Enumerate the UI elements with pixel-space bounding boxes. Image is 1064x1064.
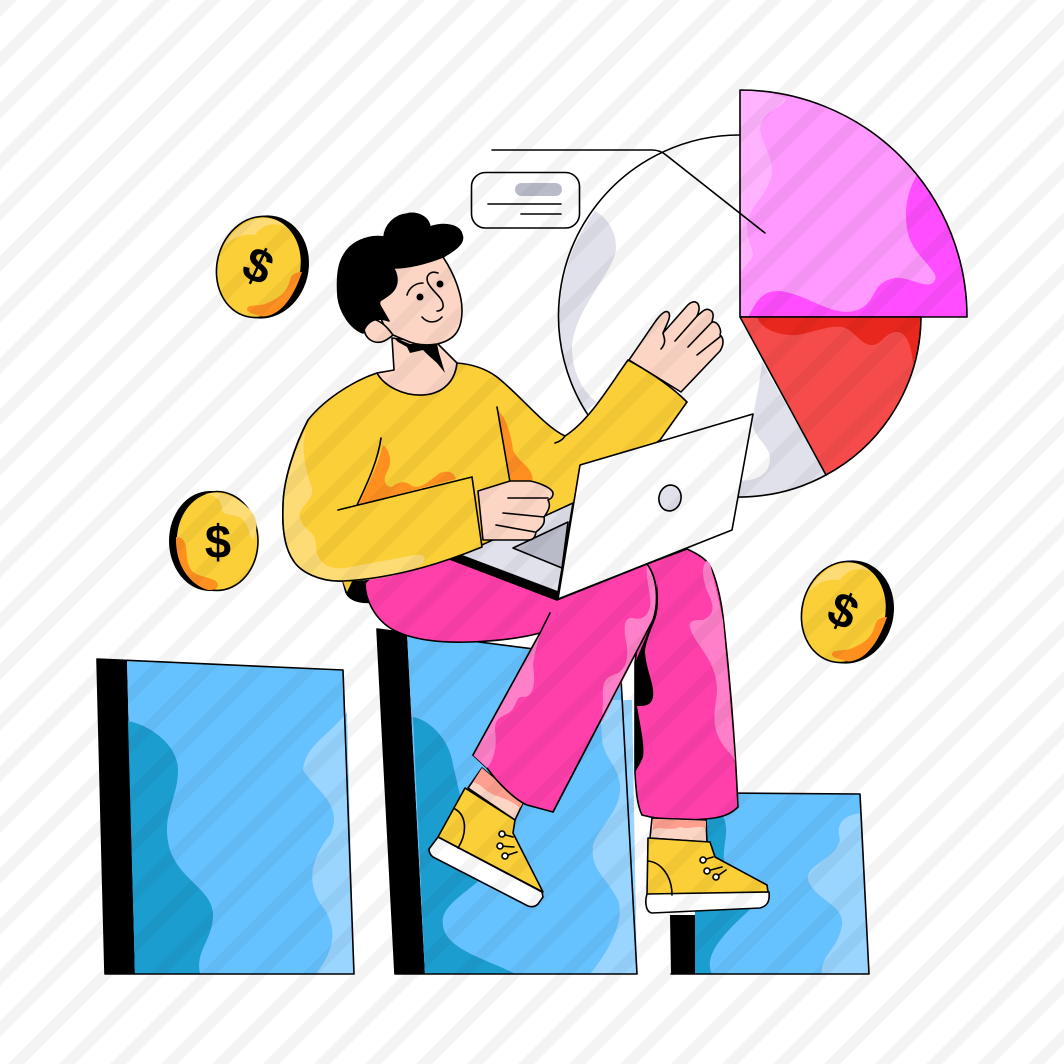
sweater (283, 360, 687, 581)
hand on laptop (478, 481, 553, 540)
pie slice: red (740, 317, 921, 475)
face details (407, 272, 443, 322)
laptop logo (657, 483, 683, 513)
bar 2 (377, 629, 637, 974)
dollar sign: $ (819, 582, 866, 641)
laptop base (447, 503, 573, 600)
pie slice: pink (740, 90, 967, 317)
left forearm sleeve (283, 420, 482, 581)
callout box (472, 172, 580, 228)
pie chart (492, 90, 967, 497)
hair (338, 213, 463, 333)
laptop lid (558, 414, 753, 599)
pie background circle (559, 135, 921, 497)
dollar sign: $ (205, 515, 231, 568)
bar 3 (670, 793, 869, 974)
raised hand (629, 302, 723, 392)
coin: middle left (169, 491, 258, 591)
back shoe (646, 838, 769, 913)
neck (377, 337, 457, 395)
back ankle (650, 818, 707, 842)
seat shadow (342, 578, 371, 603)
pointer line (492, 150, 765, 233)
front leg and thigh pants (365, 558, 657, 812)
person (283, 213, 769, 913)
back leg pants (635, 549, 738, 820)
bar 1 (97, 659, 354, 974)
head (338, 213, 463, 345)
ear (364, 319, 393, 342)
orange fold shading (358, 445, 456, 505)
dollar sign: $ (234, 237, 281, 296)
coin: right (791, 551, 905, 673)
front shoe (429, 788, 543, 907)
coin: top left (206, 206, 320, 328)
front ankle (468, 768, 523, 820)
